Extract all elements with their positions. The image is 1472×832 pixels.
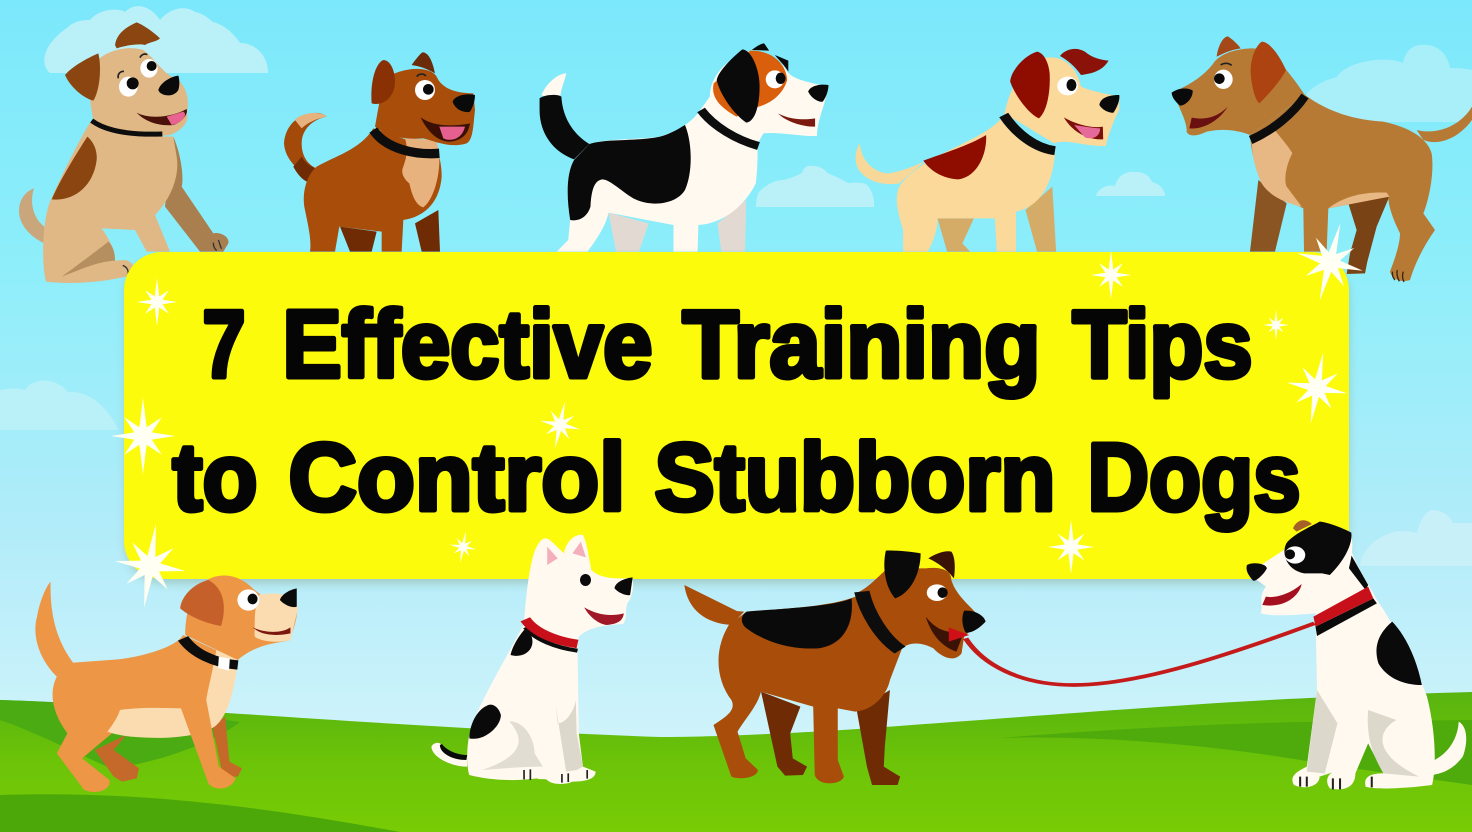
dog 2: brown dog <box>284 52 475 252</box>
title line 1: Training <box>682 291 1040 398</box>
dog 5: brown dog facing left <box>1172 36 1472 282</box>
title line 2: Stubborn <box>654 424 1056 531</box>
title line 2: to <box>172 424 258 531</box>
title line 1: 7 <box>202 291 246 398</box>
grass hills <box>0 692 1472 832</box>
title line 2: Dogs <box>1088 424 1300 531</box>
dog 9: white dog with black patches on leash <box>1247 520 1466 789</box>
dog 7: white sitting dog <box>431 535 633 784</box>
dog 4: cream dog with red patches <box>856 49 1119 252</box>
dog 1: tan sitting dog <box>19 22 229 283</box>
dog 3: black white and orange dog <box>540 43 828 252</box>
dog 6: orange dog at lower left <box>35 575 298 792</box>
banner <box>124 252 1349 583</box>
dog 8: brown and black dog holding leash <box>684 551 986 785</box>
title line 2: Control <box>288 424 626 531</box>
title line 1 <box>202 291 1252 398</box>
sparkles <box>109 215 1373 613</box>
title line 1: Effective <box>282 291 652 398</box>
clouds <box>0 6 1472 566</box>
title line 2 <box>172 424 1300 531</box>
title <box>172 291 1300 531</box>
title line 1: Tips <box>1072 291 1252 398</box>
red leash <box>966 623 1314 685</box>
